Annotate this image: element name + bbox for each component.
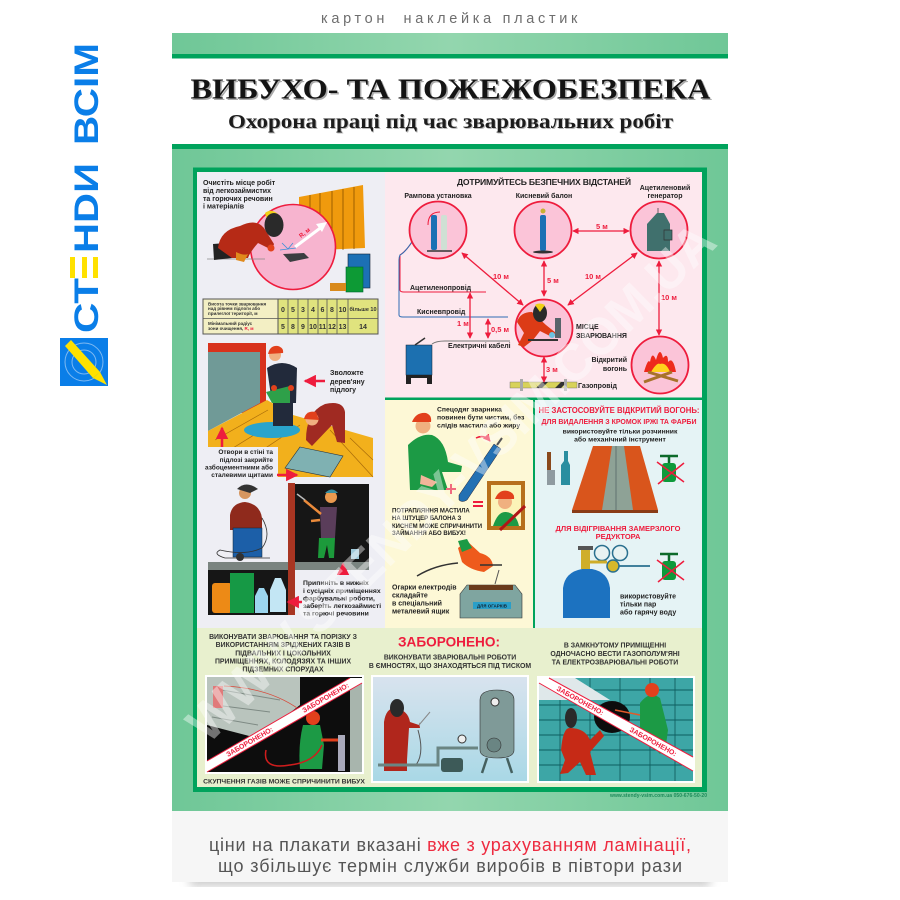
distance arrows bbox=[462, 231, 659, 382]
text: stop painting: заберіть легкозаймисті bbox=[303, 602, 381, 610]
top caption: картон наклейка пластик bbox=[321, 11, 579, 27]
text: clean workwear: повинен бути чистим, без bbox=[437, 414, 525, 422]
text: electrode stubs: Огарки електродів bbox=[392, 584, 457, 592]
pricing note bbox=[172, 811, 728, 882]
arrow: to worker bbox=[305, 380, 325, 382]
instruction text: від легкозаймистих bbox=[203, 187, 271, 195]
text: electrode stubs: складайте bbox=[392, 592, 428, 600]
clearance table: над рівнем підлоги або bbox=[208, 305, 260, 311]
prohibition band right: ЗАБОРОНЕНО: bbox=[628, 727, 677, 758]
centre prohibition text: ВИКОНУВАТИ ЗВАРЮВАЛЬНІ РОБОТИ bbox=[384, 654, 516, 662]
poster shadow bbox=[190, 874, 710, 886]
circle: acetylene generator bbox=[630, 202, 688, 258]
illustration: wall, floor and workers with shields bbox=[203, 343, 373, 479]
clearance table: 12 bbox=[328, 324, 336, 331]
caption: wet the floor: Зволожте bbox=[330, 370, 364, 377]
clearance table: 14 bbox=[359, 324, 367, 331]
red heading: НЕ ЗАСТОСОВУЙТЕ ВІДКРИТИЙ ВОГОНЬ: bbox=[538, 406, 700, 415]
panel: no open flame bbox=[535, 400, 702, 628]
logo pencil badge bbox=[60, 338, 108, 386]
brick column bbox=[288, 483, 295, 615]
place labels: МІСЦЕ bbox=[576, 324, 599, 331]
clearance table: 10 bbox=[309, 324, 317, 331]
panel: prohibited bbox=[197, 628, 702, 787]
brush bbox=[547, 452, 555, 485]
text box: openings: підлозі закрийте bbox=[220, 456, 273, 464]
red subheading two: РЕДУКТОРА bbox=[596, 532, 641, 541]
distance labels: 3 м bbox=[546, 365, 558, 374]
left prohibition text: ПРИМІЩЕННЯХ, КОЛОДЯЗЯХ ТА ІНШИХ bbox=[215, 658, 351, 666]
instruction text: Очистіть місце робіт bbox=[203, 179, 276, 187]
advice: steam: або гарячу воду bbox=[620, 608, 676, 616]
place labels: Газопровід bbox=[578, 382, 617, 390]
left prohibition text bbox=[209, 634, 357, 674]
panel background bbox=[535, 400, 702, 628]
text: stop painting: Припиніть в нижніх bbox=[303, 579, 369, 587]
distance labels: 0,5 м bbox=[491, 325, 510, 334]
crouching welder bbox=[207, 211, 284, 262]
clearance table: 6 bbox=[321, 307, 325, 314]
panel background bbox=[197, 628, 702, 787]
clearance table: 3 bbox=[301, 307, 305, 314]
worker bending with shield bbox=[285, 403, 345, 477]
poster green background bbox=[172, 33, 728, 811]
caption: wet the floor: дерев'яну bbox=[330, 379, 365, 386]
place labels bbox=[404, 184, 690, 390]
text: stop painting: та горючі речовини bbox=[303, 610, 369, 618]
clearance table: більше 10 bbox=[349, 306, 377, 313]
crossed torch one bbox=[657, 456, 684, 484]
header block bbox=[172, 54, 728, 149]
plus sign bbox=[446, 484, 456, 494]
picture: basement gas bbox=[205, 675, 364, 774]
floor slab bbox=[208, 562, 369, 570]
floor planks bbox=[215, 410, 373, 477]
text: oil warning: КИСНЕМ МОЖЕ СПРИЧИНИТИ bbox=[392, 524, 482, 530]
prohibition band right bbox=[539, 678, 693, 771]
gas lines bbox=[399, 212, 510, 344]
welding machine bbox=[406, 338, 432, 384]
panel background bbox=[197, 172, 385, 628]
stubs box bbox=[460, 585, 522, 618]
dark room upper bbox=[295, 484, 369, 562]
circle: oxygen cylinder bbox=[514, 202, 572, 258]
panel heading: ДОТРИМУЙТЕСЬ БЕЗПЕЧНИХ ВІДСТАНЕЙ bbox=[457, 176, 631, 187]
logo wordmark bbox=[68, 43, 106, 333]
place labels: Ацетиленовий bbox=[640, 184, 690, 192]
text: oil warning: НА ШТУЦЕР БАЛОНА З bbox=[392, 516, 462, 522]
centre prohibition text: В ЄМНОСТЯХ, ЩО ЗНАХОДЯТЬСЯ ПІД ТИСКОМ bbox=[369, 663, 531, 670]
stubs box: ДЛЯ ОГАРКІВ bbox=[477, 604, 508, 608]
brick wall with window bbox=[208, 343, 266, 431]
pink safety radius circle bbox=[250, 204, 336, 290]
note line two: що збільшує термін служби виробів в півтори рази bbox=[218, 856, 682, 876]
rusty metal plates bbox=[572, 446, 658, 513]
clearance table: 11 bbox=[319, 324, 326, 331]
poster bbox=[172, 33, 728, 811]
right prohibition text: В ЗАМКНУТОМУ ПРИМІЩЕННІ bbox=[564, 642, 666, 650]
note line one: ціни на плакати вказані вже з урахуванням ламінації, bbox=[209, 835, 691, 855]
advice: steam: тільки пар bbox=[620, 600, 656, 608]
circle: ramp installation bbox=[410, 202, 466, 258]
inner frame bbox=[193, 168, 707, 792]
text box: openings bbox=[203, 447, 278, 479]
panel: oil and electrode stubs bbox=[385, 400, 533, 628]
arrow: to shield bbox=[277, 474, 297, 476]
wooden floor bbox=[208, 400, 373, 477]
clearance table: 10 bbox=[339, 307, 346, 314]
note background bbox=[172, 811, 728, 882]
crossed torch two bbox=[657, 554, 684, 582]
subtitle: Охорона праці під час зварювальних робіт bbox=[229, 113, 674, 134]
panel background bbox=[385, 400, 533, 628]
picture: pressurised vessel bbox=[371, 675, 529, 783]
distance labels: 10 м bbox=[661, 293, 677, 302]
distance labels: 1 м bbox=[457, 319, 469, 328]
text: electrode stubs: металевий ящик bbox=[392, 608, 450, 616]
place labels: Кисневпровід bbox=[417, 308, 466, 316]
centre prohibition text bbox=[369, 654, 531, 670]
arrow: to wall opening bbox=[221, 428, 223, 447]
oxygen cylinder with oil bbox=[459, 437, 502, 502]
circle: open fire bbox=[632, 336, 688, 394]
distance labels bbox=[457, 222, 677, 374]
logo wordmark: ВСІМ bbox=[68, 43, 106, 145]
text box: openings: азбоцементними або bbox=[205, 464, 273, 472]
instruction text: та горючих речовин bbox=[203, 196, 273, 203]
instruction text: і матеріалів bbox=[203, 202, 245, 210]
distance labels: 5 м bbox=[547, 276, 559, 285]
puddle bbox=[244, 422, 300, 438]
caption: gas accumulation: СКУПЧЕННЯ ГАЗІВ МОЖЕ СПРИЧИНИТИ ВИБУХ bbox=[203, 778, 365, 786]
prohibition band right: ЗАБОРОНЕНО: bbox=[555, 686, 604, 717]
place labels: Відкритий bbox=[591, 356, 627, 364]
containers of combustibles bbox=[212, 573, 286, 613]
clearance table: 8 bbox=[330, 307, 334, 314]
wooden wall bbox=[299, 185, 365, 250]
watermark: WWW.STENDY-VSIM.COM.UA bbox=[176, 212, 727, 754]
prohibition band left bbox=[207, 678, 362, 772]
right prohibition text: ОДНОЧАСНО ВЕСТИ ГАЗОПОЛУМ'ЯНІ bbox=[550, 651, 680, 658]
clearance table: 0 bbox=[281, 307, 285, 314]
text box: openings: Отвори в стіні та bbox=[218, 448, 273, 456]
prohibition band left: ЗАБОРОНЕНО: bbox=[302, 682, 350, 715]
clearance table: Мінімальний радіус bbox=[208, 320, 253, 326]
clearance table bbox=[203, 299, 378, 334]
dark room lower bbox=[208, 570, 288, 615]
red subheading one: ДЛЯ ВИДАЛЕННЯ З КРОМОК ІРЖІ ТА ФАРБИ bbox=[542, 419, 696, 426]
place labels: Рампова установка bbox=[404, 193, 472, 200]
solvent bottle bbox=[561, 451, 570, 485]
radius arrow bbox=[295, 222, 327, 247]
barrels bbox=[330, 254, 370, 292]
left prohibition text: ПІДЗЕМНИХ СПОРУДАХ bbox=[242, 666, 324, 674]
main title: ВИБУХО- ТА ПОЖЕЖОБЕЗПЕКА bbox=[192, 76, 712, 107]
arrow: to lower room bbox=[288, 601, 302, 603]
red subheading two: ДЛЯ ВІДІГРІВАННЯ ЗАМЕРЗЛОГО bbox=[556, 524, 681, 533]
clearance table: Висота точки зварювання bbox=[208, 302, 266, 306]
worker with watering can bbox=[266, 346, 297, 426]
place labels: ЗВАРЮВАННЯ bbox=[576, 333, 627, 340]
distance labels: 10 м bbox=[493, 272, 509, 281]
text box: openings: сталевими щитами bbox=[211, 472, 273, 479]
clearance table: 4 bbox=[311, 307, 315, 314]
panel: clean the workplace bbox=[197, 172, 385, 628]
advice: solvent: або механічний інструмент bbox=[574, 436, 667, 444]
radius arrow: R, м bbox=[299, 227, 312, 240]
subtitle: Охорона праці під час зварювальних робіт bbox=[228, 112, 673, 133]
place labels: Кисневий балон bbox=[516, 192, 572, 200]
text: clean workwear: Спецодяг зварника bbox=[437, 406, 502, 414]
place labels: вогонь bbox=[603, 366, 628, 373]
illustration: welding above a room with combustibles bbox=[208, 483, 381, 618]
clearance table: 9 bbox=[301, 324, 305, 331]
welder with machine bbox=[217, 484, 270, 561]
right prohibition text: ТА ЕЛЕКТРОЗВАРЮВАЛЬНІ РОБОТИ bbox=[552, 660, 678, 666]
clearance table: 8 bbox=[291, 324, 295, 331]
text: stop painting: фарбувальні роботи, bbox=[303, 594, 375, 602]
clearance table: 5 bbox=[281, 324, 285, 331]
clearance table: прилеглої території, м bbox=[208, 311, 258, 316]
gas pipeline bbox=[510, 379, 577, 391]
prohibition band left: ЗАБОРОНЕНО: bbox=[226, 726, 274, 759]
clearance table: 13 bbox=[339, 324, 346, 331]
logo wordmark: НDИ bbox=[68, 163, 106, 253]
left prohibition text: ВИКОРИСТАННЯМ ЗРІДЖЕНИХ ГАЗІВ В bbox=[216, 642, 350, 649]
place labels: Ацетиленопровід bbox=[410, 284, 472, 292]
picture: confined space bbox=[537, 676, 695, 783]
welder in dark room bbox=[297, 490, 359, 559]
main title: ВИБУХО- ТА ПОЖЕЖОБЕЗПЕКА bbox=[190, 74, 711, 106]
place labels: Електричні кабелі bbox=[448, 342, 511, 350]
clearance table: 5 bbox=[291, 307, 295, 314]
oxygen cylinder with reducer bbox=[563, 546, 650, 618]
circle: welding place bbox=[516, 300, 572, 356]
text: stop painting: і сусідніх приміщеннях bbox=[303, 587, 381, 595]
glove with electrode holder bbox=[417, 539, 502, 584]
left prohibition text: ВИКОНУВАТИ ЗВАРЮВАННЯ ТА ПОРІЗКУ З bbox=[209, 634, 357, 641]
text: electrode stubs: в спеціальний bbox=[392, 600, 442, 608]
equals sign bbox=[473, 502, 483, 506]
heading: prohibited: ЗАБОРОНЕНО: bbox=[398, 634, 500, 650]
text: oil warning: ЗАЙМАННЯ АБО ВИБУХ! bbox=[392, 529, 466, 537]
right prohibition text bbox=[550, 642, 680, 666]
panel: safe distances bbox=[385, 172, 702, 398]
text: clean workwear: слідів мастила або жиру bbox=[437, 422, 520, 430]
panel background bbox=[385, 172, 702, 398]
distance labels: 5 м bbox=[596, 222, 608, 231]
advice: steam: використовуйте bbox=[620, 592, 676, 600]
place labels: генератор bbox=[648, 193, 682, 200]
work plate with sparks bbox=[280, 243, 309, 262]
left prohibition text: ПІДВАЛЬНИХ І ЦОКОЛЬНИХ bbox=[235, 650, 331, 658]
publisher line: www.stendy-vsim.com.ua 050-676-50-20 bbox=[609, 793, 707, 799]
distance labels: 10 м bbox=[585, 272, 601, 281]
advice: solvent: використовуйте тільки розчинник bbox=[563, 428, 678, 436]
worker in green bbox=[408, 413, 462, 490]
clearance table: зони очищення, R, м bbox=[208, 326, 254, 331]
logo wordmark: СТ bbox=[68, 278, 106, 333]
framed portrait bbox=[487, 481, 525, 530]
arrow: to upper room bbox=[342, 564, 344, 575]
caption: wet the floor: підлогу bbox=[330, 386, 356, 394]
text: oil warning: ПОТРАПЛЯННЯ МАСТИЛА bbox=[392, 508, 470, 514]
brand logo: СТЕНДИ ВСІМ bbox=[60, 43, 108, 386]
